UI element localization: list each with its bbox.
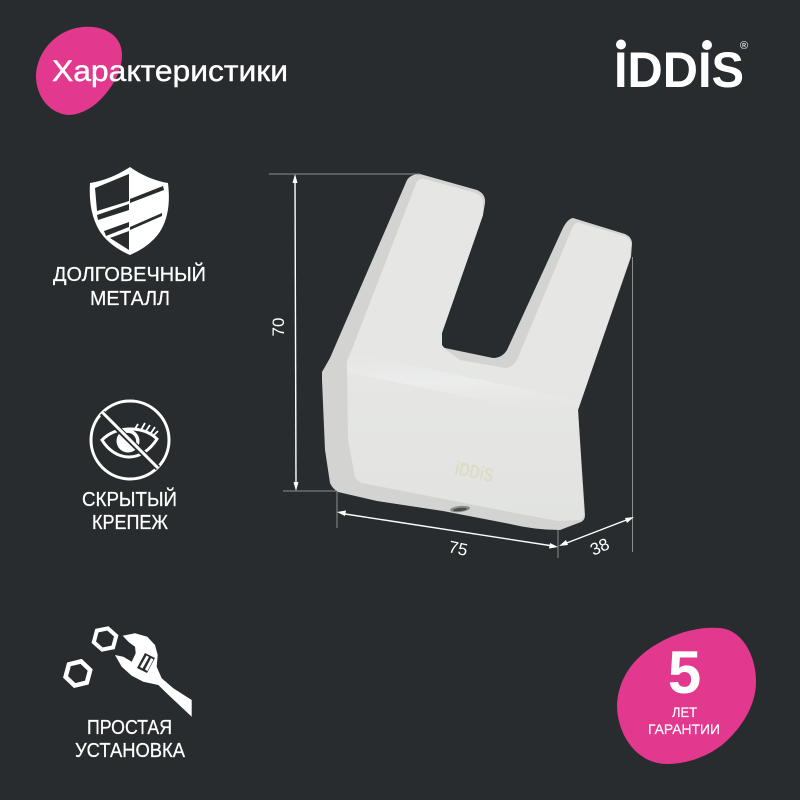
heading: Характеристики [36, 27, 288, 115]
badge: 5 лет гарантии: ГАРАНТИИ [648, 721, 720, 737]
dimension: 70 height [269, 174, 420, 491]
dimension: 70 height: 70 [269, 318, 288, 336]
icon: wrench and nuts [64, 626, 192, 717]
screw hole [450, 505, 470, 513]
dimension: 75 width [337, 492, 558, 560]
badge: 5 лет гарантии: ЛЕТ [672, 704, 697, 720]
label: скрытый крепеж: СКРЫТЫЙ [82, 487, 177, 511]
heading: Характеристики: Характеристики [52, 55, 288, 88]
label: простая установка [75, 717, 186, 762]
icon: shield [90, 167, 169, 255]
label: долговечный металл: ДОЛГОВЕЧНЫЙ [53, 262, 206, 286]
icon: crossed eye [91, 401, 169, 479]
dimension: 75 width: 75 [447, 537, 469, 560]
label: скрытый крепеж [82, 487, 177, 534]
label: долговечный металл [53, 262, 206, 310]
badge: 5 лет гарантии: 5 [668, 639, 701, 706]
logo: IDDIS: IDDIS [614, 42, 744, 98]
product logo: iDDiS [453, 458, 495, 487]
dimension: 38 depth: 38 [587, 534, 612, 560]
label: долговечный металл: МЕТАЛЛ [90, 288, 170, 310]
dimension: 38 depth [559, 257, 634, 560]
logo: IDDIS: ® [740, 40, 748, 52]
label: скрытый крепеж: КРЕПЕЖ [92, 512, 168, 534]
label: простая установка: ПРОСТАЯ [87, 717, 172, 739]
badge: 5 лет гарантии [617, 628, 756, 764]
product: white hook [322, 174, 632, 530]
label: простая установка: УСТАНОВКА [75, 740, 186, 762]
